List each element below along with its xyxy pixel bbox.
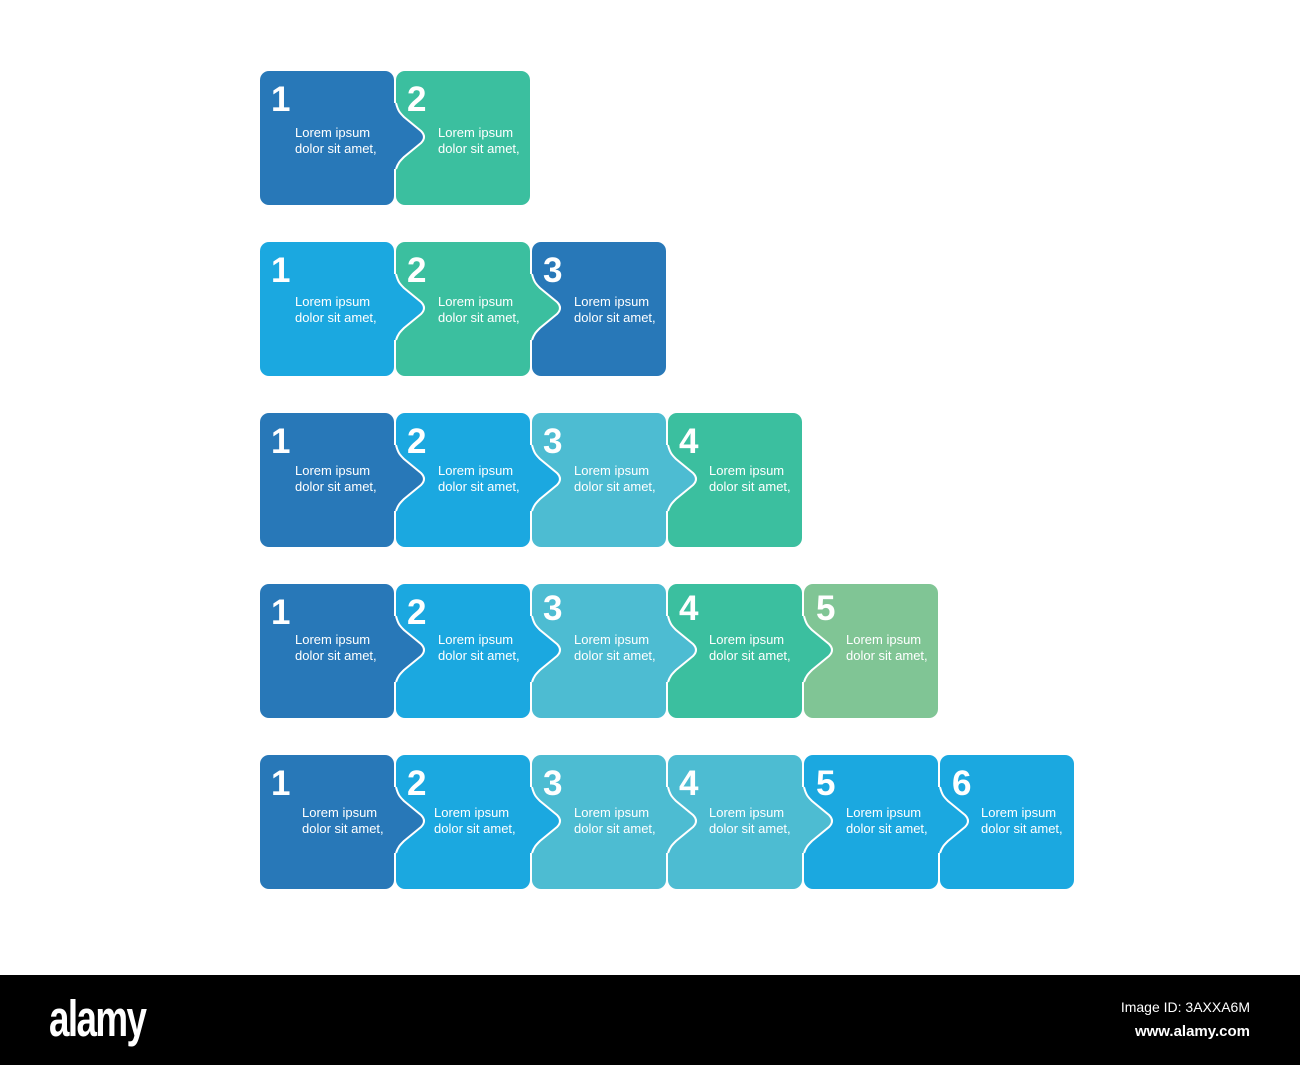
footer bar: Image ID: 3AXXA6M [1121, 999, 1250, 1015]
row 1: two steps: dolor sit amet, [295, 141, 377, 156]
footer bar: alamy [49, 991, 147, 1047]
row 5: six steps: 4 [679, 764, 699, 803]
row 4: five steps: dolor sit amet, [438, 648, 520, 663]
row 4: five steps: Lorem ipsum [574, 632, 649, 647]
row 3: four steps: dolor sit amet, [295, 479, 377, 494]
row 5: six steps: 2 [407, 764, 426, 803]
row 5: six steps: Lorem ipsum [846, 805, 921, 820]
row 2: three steps [260, 242, 666, 376]
footer bar [0, 975, 1300, 1065]
row 4: five steps: dolor sit amet, [574, 648, 656, 663]
row 5: six steps: dolor sit amet, [709, 821, 791, 836]
row 4: five steps: dolor sit amet, [295, 648, 377, 663]
row 5: six steps: 1 [271, 764, 290, 803]
row 3: four steps: 4 [679, 422, 699, 461]
row 1: two steps: dolor sit amet, [438, 141, 520, 156]
row 5: six steps: Lorem ipsum [709, 805, 784, 820]
row 4: five steps: Lorem ipsum [846, 632, 921, 647]
row 4: five steps [260, 584, 938, 718]
row 5: six steps: dolor sit amet, [302, 821, 384, 836]
row 5: six steps: Lorem ipsum [434, 805, 509, 820]
row 2: three steps: 2 [407, 251, 426, 290]
row 2: three steps: 1 [271, 251, 290, 290]
row 4: five steps: 3 [543, 589, 562, 628]
row 2: three steps: Lorem ipsum [295, 294, 370, 309]
row 5: six steps: dolor sit amet, [846, 821, 928, 836]
row 1: two steps: Lorem ipsum [438, 125, 513, 140]
row 5: six steps: Lorem ipsum [574, 805, 649, 820]
row 3: four steps: dolor sit amet, [574, 479, 656, 494]
row 5: six steps: 3 [543, 764, 562, 803]
row 2: three steps: dolor sit amet, [295, 310, 377, 325]
row 4: five steps: Lorem ipsum [295, 632, 370, 647]
row 1: two steps: Lorem ipsum [295, 125, 370, 140]
row 4: five steps: 1 [271, 593, 290, 632]
row 3: four steps: Lorem ipsum [574, 463, 649, 478]
row 5: six steps: Lorem ipsum [302, 805, 377, 820]
row 5: six steps: 6 [952, 764, 971, 803]
row 2: three steps: Lorem ipsum [438, 294, 513, 309]
row 4: five steps: 2 [407, 593, 426, 632]
row 5: six steps [260, 755, 1074, 889]
row 5: six steps: dolor sit amet, [434, 821, 516, 836]
row 2: three steps: Lorem ipsum [574, 294, 649, 309]
row 3: four steps: Lorem ipsum [709, 463, 784, 478]
row 5: six steps: Lorem ipsum [981, 805, 1056, 820]
row 3: four steps: Lorem ipsum [295, 463, 370, 478]
row 4: five steps: 5 [816, 589, 835, 628]
row 2: three steps: dolor sit amet, [574, 310, 656, 325]
row 4: five steps: dolor sit amet, [846, 648, 928, 663]
row 4: five steps: Lorem ipsum [709, 632, 784, 647]
row 1: two steps: 2 [407, 80, 426, 119]
row 3: four steps: 3 [543, 422, 562, 461]
row 5: six steps: 5 [816, 764, 835, 803]
row 3: four steps: 1 [271, 422, 290, 461]
row 5: six steps: dolor sit amet, [981, 821, 1063, 836]
row 3: four steps [260, 413, 802, 547]
row 3: four steps: 2 [407, 422, 426, 461]
row 3: four steps: dolor sit amet, [709, 479, 791, 494]
row 5: six steps: dolor sit amet, [574, 821, 656, 836]
row 3: four steps: dolor sit amet, [438, 479, 520, 494]
row 4: five steps: Lorem ipsum [438, 632, 513, 647]
row 1: two steps [260, 71, 530, 205]
row 2: three steps: dolor sit amet, [438, 310, 520, 325]
row 2: three steps: 3 [543, 251, 562, 290]
row 4: five steps: dolor sit amet, [709, 648, 791, 663]
row 1: two steps: 1 [271, 80, 290, 119]
row 4: five steps: 4 [679, 589, 699, 628]
row 3: four steps: Lorem ipsum [438, 463, 513, 478]
footer bar: www.alamy.com [1134, 1023, 1250, 1040]
